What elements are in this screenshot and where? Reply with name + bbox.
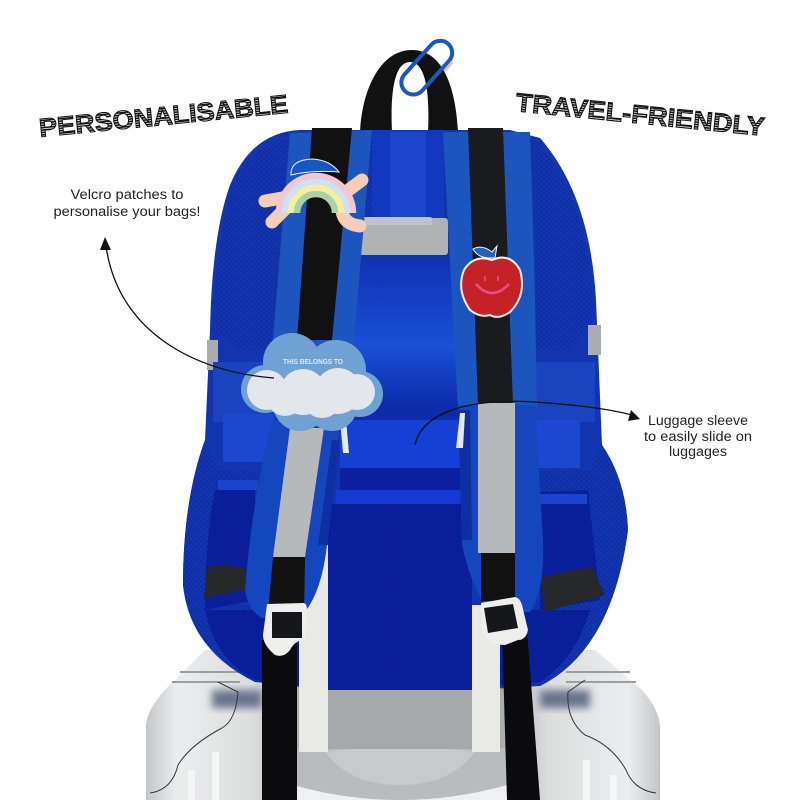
heading: travel-friendly: TRAVEL-FRIENDLY <box>514 87 766 142</box>
luggage sleeve band <box>223 414 580 504</box>
rainbow arch <box>279 176 353 213</box>
top collar <box>372 130 444 222</box>
caption: luggage sleeve: Luggage sleeve <box>648 413 748 428</box>
zip pulls <box>340 413 465 453</box>
suitcase <box>146 650 660 800</box>
patch: apple <box>461 246 522 317</box>
lower centre mesh <box>328 504 472 690</box>
arrow: velcro patches <box>100 237 274 378</box>
cloud writing area <box>247 368 375 418</box>
backpack body <box>183 130 628 690</box>
side straps <box>204 565 605 612</box>
cloud body <box>241 333 383 431</box>
caption: luggage sleeve: to easily slide on <box>644 429 752 444</box>
rainbow cap <box>291 159 339 175</box>
luggage trolley handle base <box>293 689 507 800</box>
left shoulder strap <box>245 128 372 618</box>
trolley rails <box>299 545 500 752</box>
left buckle <box>263 603 307 656</box>
heading: personalisable: PERSONALISABLE <box>38 89 289 143</box>
patch: rainbow <box>265 159 362 226</box>
upper pocket panels <box>213 362 595 422</box>
side pocket left <box>183 440 328 685</box>
side pocket right <box>472 445 628 686</box>
side reflective strips <box>207 325 601 370</box>
lower hanging webbing straps <box>262 630 540 800</box>
patch label: THIS BELONGS TO <box>283 359 344 366</box>
caption: luggage sleeve: luggages <box>669 444 727 459</box>
patch: cloud name tag <box>241 333 383 431</box>
grey band of trolley handle <box>358 217 448 255</box>
carabiner clip <box>396 36 457 99</box>
arrow: luggage sleeve <box>415 401 640 445</box>
rainbow limbs <box>265 180 362 226</box>
trolley sleeve opening <box>340 250 460 410</box>
backpack top carry handle <box>360 50 458 132</box>
caption: velcro patches: Velcro patches to <box>70 187 184 202</box>
back panel mesh <box>213 140 594 350</box>
caption: velcro patches: personalise your bags! <box>54 204 200 219</box>
right buckle <box>481 597 528 645</box>
right shoulder strap <box>443 128 543 612</box>
